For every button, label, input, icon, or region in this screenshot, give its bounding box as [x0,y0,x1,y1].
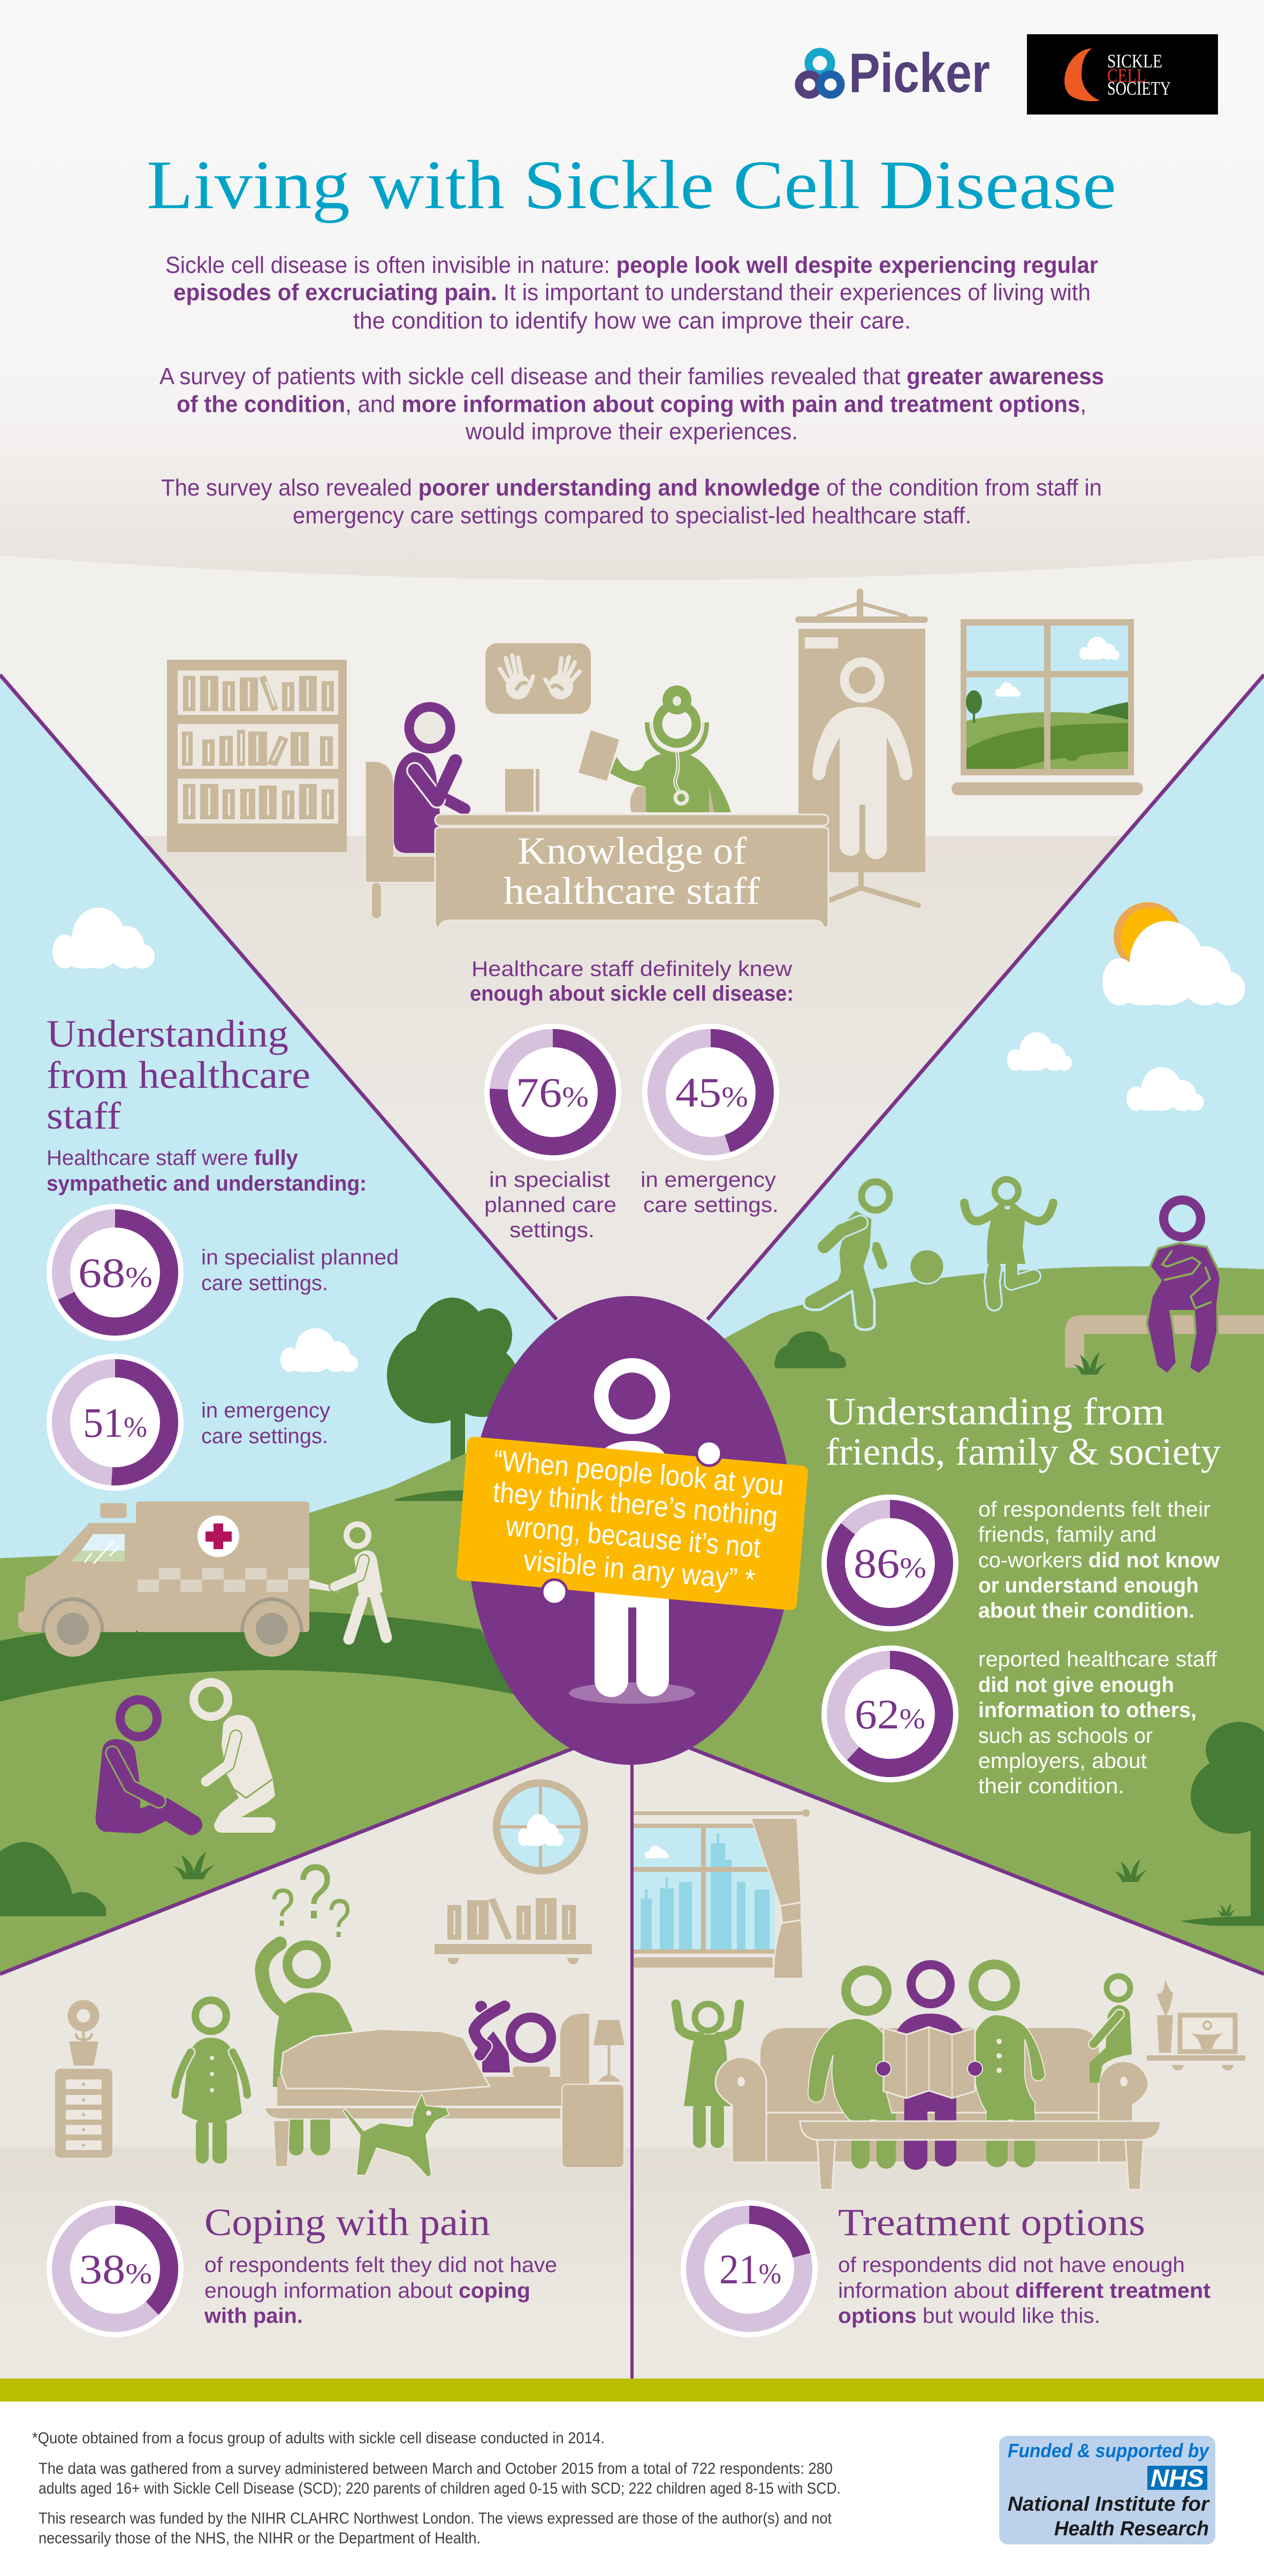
child standing [175,2000,247,2163]
donut 51 [47,1354,184,1491]
label 45: care settings. [643,1193,779,1217]
logo: Picker [799,42,990,104]
intro text: episodes of excruciating pain. It is important to understand their experiences of living with [173,279,1091,306]
funder box: Health Research [1054,2518,1209,2540]
bush left [0,1842,106,1916]
label 76 [484,1168,616,1242]
label 62: employers, about [978,1749,1147,1773]
label 76: settings. [509,1218,595,1242]
quote banner: they think there’s nothing [492,1476,779,1533]
side shelf [1147,1979,1245,2070]
text: fully sympathetic [47,1146,367,1195]
donut 68: 68% [78,1249,153,1296]
left green hills [0,1429,589,1974]
text: fully sympathetic: Healthcare staff were fully [47,1146,299,1170]
seated purple figure [1147,1200,1221,1374]
kneeling purple figure [96,1699,202,1835]
text: treatment options: options but would like this. [838,2304,1100,2328]
funder box: NHS [1151,2464,1204,2492]
donut 62 [821,1645,958,1782]
desk with heading [435,814,828,928]
text: treatment options [838,2201,1210,2328]
heading: friends family society: friends, family & society [826,1430,1221,1473]
label 86: about their condition. [978,1599,1194,1622]
child on sofa arm [1090,1976,1132,2083]
intro text [159,252,1104,529]
anatomy chart on stand [795,592,928,905]
donut 51: 51% [83,1399,147,1446]
donut 45 [642,1024,779,1161]
heading: friends family society [826,1390,1221,1473]
chair [366,761,435,919]
label 68 [201,1246,399,1295]
heading: understanding from healthcare staff [47,1012,310,1137]
bench [1065,1315,1264,1368]
panel: bottom rooms [0,1725,1264,2379]
logo: Sickle Cell Society: SICKLE [1107,50,1162,72]
label 62: did not give enough [978,1673,1174,1697]
footnotes: *Quote obtained from a focus group of adults with sickle cell disease conducted in 2014. [32,2429,605,2447]
purple reader [896,1965,964,2170]
tree behind figure [387,1298,519,1501]
coffee table [800,2121,1161,2190]
text: fully sympathetic: sympathetic and understanding: [47,1172,367,1195]
label 68: in specialist planned [201,1246,399,1269]
bed [265,2014,625,2168]
label 86: or understand enough [978,1574,1199,1597]
green adult right [973,1964,1045,2167]
grass right [1114,1859,1148,1882]
ambulance [18,1502,309,1657]
quote banner: visible in any way” * [522,1544,756,1596]
label 86: of respondents felt their [978,1498,1210,1521]
label 62: information to others, [978,1698,1197,1722]
text: coping with pain: of respondents felt they did not have [204,2253,557,2277]
title: Living with Sickle Cell Disease [147,147,1116,224]
ball [910,1249,944,1284]
label 51: care settings. [201,1424,328,1448]
shelf with books [435,1898,592,1964]
footnotes: The data was gathered from a survey administered between March and October 2015 from a total of 722 respondents: 280 [39,2460,833,2478]
tree right [1180,1722,1264,1926]
olive band [0,2379,1264,2402]
label 45: in emergency [641,1168,776,1192]
panel: healthcare staff knowledge room [167,592,1143,928]
donut 86: 86% [854,1540,926,1587]
player kicking ball [804,1182,889,1330]
window with landscape [951,619,1143,795]
right green hill [693,1267,1264,1974]
text: treatment options: information about different treatment [838,2279,1210,2303]
donut 21 [681,2200,818,2337]
label 68: care settings. [201,1271,328,1295]
question marks [270,1848,351,1949]
chest of drawers with flower [55,2005,112,2158]
text: coping with pain: Coping with pain [204,2201,490,2244]
footnotes: necessarily those of the NHS, the NIHR or the Department of Health. [39,2529,481,2547]
donut 62: 62% [855,1691,925,1737]
label 76: planned care [484,1193,616,1217]
donut 76 [484,1024,621,1161]
label 45 [641,1168,779,1217]
paramedic figure [309,1524,386,1639]
panel: left sky [0,675,557,1766]
donut 86 [821,1495,958,1632]
desk with heading: healthcare staff [504,870,760,912]
label 62: such as schools or [978,1724,1153,1748]
bedroom illustration [55,1783,625,2177]
intro text: emergency care settings compared to specialist-led healthcare staff. [293,502,971,529]
intro text: the condition to identify how we can improve their care. [353,308,911,334]
intro text: of the condition, and more information about coping with pain and treatment options, [177,391,1086,417]
doctor figure [578,685,731,812]
header background [0,0,1264,1323]
label 51 [201,1399,330,1448]
bookcase [167,660,347,852]
text: treatment options: Treatment options [838,2201,1145,2244]
logo: Sickle Cell Society [1027,34,1218,115]
intro text: would improve their experiences. [465,418,798,445]
round window [497,1783,584,1871]
label 86: co-workers did not know [978,1549,1220,1572]
label 76: in specialist [489,1168,610,1192]
quote banner [463,1441,802,1604]
donut 45: 45% [675,1069,748,1116]
quote banner: “When people look at you [492,1444,785,1502]
dog [343,2094,449,2177]
heading: understanding from healthcare staff: staff [47,1094,121,1137]
living room illustration [634,1809,1245,2190]
question marks: ? [328,1888,351,1949]
logo: Sickle Cell Society: CELL [1107,65,1146,86]
footnotes: This research was funded by the NIHR CLAHRC Northwest London. The views expressed are those of the author(s) and not [39,2510,832,2527]
grass bench [1073,1352,1107,1375]
kneeling white figure [194,1682,276,1833]
footer background [0,2402,1264,2576]
grass left [172,1852,216,1879]
funder box: National Institute for [1008,2493,1210,2516]
label 86 [978,1498,1220,1622]
question marks: ? [298,1848,332,1935]
grass small [1216,1903,1236,1916]
label 51: in emergency [201,1399,330,1422]
intro text: A survey of patients with sickle cell disease and their families revealed that greater awareness [159,363,1104,390]
logo: Sickle Cell Society: SOCIETY [1107,78,1171,99]
panel: right sky [707,675,1264,1766]
heading: understanding from healthcare staff: from healthcare [47,1054,310,1096]
open map [876,2027,983,2098]
donut 38: 38% [79,2246,152,2292]
label 62: their condition. [978,1774,1124,1798]
sofa [715,2028,1148,2162]
diagonal divider lines [0,675,1264,1320]
heading: understanding from healthcare staff: Understanding [47,1012,288,1055]
funder box: Funded & supported by [1008,2440,1210,2461]
label 62: reported healthcare staff [978,1648,1217,1671]
label 86: friends, family and [978,1523,1156,1546]
intro text: Sickle cell disease is often invisible in nature: people look well despite experiencing regular [165,252,1098,278]
footnotes [32,2429,841,2547]
blanket [281,2029,490,2092]
central figure [569,1366,695,1704]
green adult left [808,1970,896,2169]
patient figure [394,707,465,853]
donut 38 [47,2200,184,2337]
bush right [774,1331,846,1368]
text: coping with pain: enough information about coping [204,2279,530,2303]
label 62 [978,1648,1217,1798]
text: definitely knew [470,957,794,1005]
text: definitely knew: enough about sickle cell disease: [470,982,794,1005]
desk with heading: Knowledge of [517,829,747,872]
kid arms up [676,2004,740,2148]
quote banner: wrong, because it’s not [504,1510,762,1564]
text: treatment options: of respondents did not have enough [838,2253,1185,2277]
footnotes: adults aged 16+ with Sickle Cell Disease (SCD); 220 parents of children aged 0-15 with SCD; 222 children aged 8-15 with SCD. [39,2480,841,2497]
donut 68 [47,1204,184,1341]
central oval [467,1296,794,1765]
heading: friends family society: Understanding from [826,1390,1164,1433]
picture with hand prints [485,643,591,714]
text: coping with pain [204,2201,557,2328]
intro text: The survey also revealed poorer understanding and knowledge of the condition from staff in [161,475,1102,501]
donut 21: 21% [719,2246,781,2292]
book on desk [505,769,539,812]
text: coping with pain: with pain. [204,2304,303,2328]
purple figure in bed [474,2001,551,2072]
text: definitely knew: Healthcare staff definitely knew [471,957,792,981]
clouds and sun [52,902,1245,1372]
adult holding head [262,1944,354,2155]
donut 76: 76% [516,1069,589,1116]
funder box [999,2436,1215,2544]
question marks: ? [270,1878,295,1938]
logo: Picker: Picker [849,42,990,104]
child jumping [964,1179,1053,1303]
city window with curtain [634,1809,810,1978]
